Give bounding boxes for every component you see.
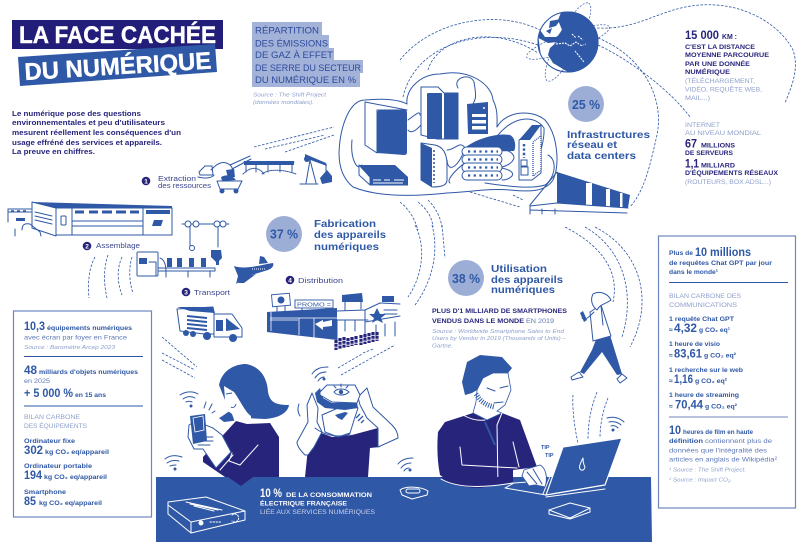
text: 15 000 km: 15 000: [685, 30, 719, 42]
panel: équipements numériques: DES ÉQUIPEMENTS: [24, 421, 88, 430]
text: smartphones vendus: PLUS D'1 MILLIARD DE SMARTPHONES: [432, 308, 568, 315]
panel: équipements numériques: 10,3: [24, 321, 45, 333]
text: 10 % consommation électrique: LIÉE AUX SERVICES NUMÉRIQUES: [260, 507, 376, 516]
panel: équipements numériques: 48: [24, 365, 38, 377]
server tower large: [365, 102, 407, 155]
step 3: transport: 3: [184, 290, 188, 296]
icon: store: [267, 293, 400, 350]
text: internet au niveau mondial: MILLIONS: [701, 142, 736, 150]
icon: laptop: TIP: [541, 445, 550, 451]
title: DU NUMÉRIQUE: [24, 47, 212, 86]
heading: répartition des émissions: DE GAZ À EFFET: [255, 50, 334, 60]
text: internet au niveau mondial: INTERNET: [685, 122, 720, 129]
network router: [359, 165, 408, 186]
text: smartphones vendus: [432, 308, 568, 350]
panel: équipements numériques: équipements numériques: [47, 325, 132, 332]
text: 10 % consommation électrique: [260, 488, 376, 516]
text: 15 000 km: KM :: [722, 34, 737, 41]
stat: 25 % infrastructures: 25 %: [572, 97, 600, 112]
text: internet au niveau mondial: 67: [685, 136, 697, 150]
text: 10 % consommation électrique: DE LA CONSOMMATION: [286, 492, 372, 499]
text: 10 % consommation électrique: ÉLECTRIQUE FRANÇAISE: [260, 498, 348, 508]
panel: requêtes et bilan carbone des communications: dans le monde¹: [669, 269, 719, 276]
icon: laptop: [505, 438, 622, 497]
text: smartphones vendus: VENDUS DANS LE MONDE: [432, 318, 525, 325]
panel: requêtes et bilan carbone des communications: 83,61: [674, 348, 703, 360]
intro text: Le numérique pose des questions: [12, 109, 141, 118]
icons: wifi signals: [165, 367, 624, 472]
panel: requêtes et bilan carbone des communications: 1 recherche sur le web: [669, 367, 743, 374]
dashed network lines: [89, 5, 795, 443]
text: internet au niveau mondial: [685, 122, 779, 186]
intro text: mesurent réellement les conséquences d'un: [12, 128, 181, 137]
text: smartphones vendus: Source : Worldwide Smartphone Sales to End: [432, 329, 565, 335]
text: 15 000 km: NUMÉRIQUE: [685, 67, 731, 76]
figure: person with VR headset: [297, 384, 398, 477]
intro text: [12, 109, 181, 156]
panel: équipements numériques: 85: [24, 496, 37, 508]
icon: factory: [8, 202, 172, 236]
network switch: [421, 143, 447, 187]
stat: 38 % utilisation: des appareils: [491, 274, 563, 286]
panel: équipements numériques: 194: [24, 470, 43, 482]
stat: 38 % utilisation: 38 %: [452, 271, 480, 286]
panel: requêtes et bilan carbone des communications: g CO₂ eq²: [705, 404, 738, 410]
panel: requêtes et bilan carbone des communications: Plus de: [669, 250, 693, 257]
icon: robot assembly line: [137, 221, 229, 277]
server towers: [421, 87, 458, 139]
panel: requêtes et bilan carbone des communications: définition: [669, 438, 703, 445]
step 1: extraction des ressources: des ressources: [158, 183, 212, 190]
text: internet au niveau mondial: MILLIARD: [701, 162, 735, 170]
panel: requêtes et bilan carbone des communications: ≈: [669, 352, 673, 360]
stat: 38 % utilisation: [448, 260, 563, 296]
icon: excavator and quarry: [198, 156, 296, 194]
step 3: transport: Transport: [194, 288, 231, 297]
panel: requêtes et bilan carbone des communications: 4,32: [674, 323, 697, 335]
text: 15 000 km: (TÉLÉCHARGEMENT,: [685, 76, 755, 85]
text: internet au niveau mondial: DE SERVEURS: [685, 150, 734, 157]
stat: 38 % utilisation: numériques: [491, 284, 555, 296]
title: LA FACE CACHÉE: [19, 21, 216, 49]
heading: répartition des émissions: DES ÉMISSIONS: [255, 38, 328, 48]
figure: walking woman: [571, 292, 627, 383]
icon: truck: [177, 307, 242, 342]
panel: requêtes et bilan carbone des communications: 10: [669, 425, 681, 437]
panel: requêtes et bilan carbone des communications: 1,16: [674, 374, 693, 386]
table: [156, 477, 652, 542]
panel: requêtes et bilan carbone des communications: g CO₂ eq²: [695, 378, 728, 385]
heading: répartition des émissions: (données mondiales).: [253, 100, 314, 106]
step 1: extraction des ressources: [142, 176, 212, 190]
panel: requêtes et bilan carbone des communications: COMMUNICATIONS: [669, 302, 738, 309]
panel: requêtes et bilan carbone des communications: articles en anglais de Wikipédia²: [669, 456, 778, 464]
panel: requêtes et bilan carbone des communications: 10 millions: [695, 247, 751, 259]
heading: répartition des émissions: DE SERRE DU SECTEUR: [255, 63, 361, 73]
panel: équipements numériques: kg CO₂ eq/appareil: [39, 500, 102, 507]
panel: requêtes et bilan carbone des communications: g CO₂ eq¹: [699, 327, 731, 334]
panel: requêtes et bilan carbone des communications: ¹ Source : The Shift Project.: [669, 468, 746, 474]
text: 15 000 km: VIDÉO, REQUÊTE WEB,: [685, 84, 762, 94]
icon: data center: [530, 172, 630, 214]
step 1: extraction des ressources: 1: [144, 178, 148, 186]
icon: laptop: TIP: [545, 453, 554, 459]
stat: 37 % fabrication: numériques: [314, 241, 379, 253]
icon: mouse: [400, 487, 428, 499]
text: internet au niveau mondial: AU NIVEAU MONDIAL: [685, 130, 761, 137]
panel: requêtes et bilan carbone des communications: g CO₂ eq²: [704, 352, 737, 360]
stat: 37 % fabrication: [266, 216, 386, 253]
step 3: transport: [182, 288, 231, 297]
panel: requêtes et bilan carbone des communications: ≈: [669, 327, 673, 334]
modem tower: [519, 125, 541, 180]
text: internet au niveau mondial: (ROUTEURS, BOX ADSL...): [685, 179, 771, 186]
intro text: usage effréné des services et appareils.: [12, 138, 162, 147]
panel: requêtes et bilan carbone des communications: 1 heure de visio: [669, 341, 720, 348]
step 2: assemblage: [83, 241, 140, 250]
panel: équipements numériques: Source : Baromètre Arcep 2023: [24, 345, 116, 351]
heading: répartition des émissions: RÉPARTITION: [255, 26, 319, 36]
step 2: assemblage: 2: [85, 244, 89, 250]
panel: équipements numériques: Ordinateur fixe: [24, 438, 75, 445]
panel: requêtes et bilan carbone des communications: [658, 236, 796, 508]
disc stack: [462, 135, 515, 180]
step 4: distribution: [286, 276, 343, 285]
panel: équipements numériques: avec écran par foyer en France: [24, 334, 127, 342]
intro text: La preuve en chiffres.: [12, 147, 95, 156]
stat: 37 % fabrication: 37 %: [270, 226, 298, 242]
panel: requêtes et bilan carbone des communications: 1 requête Chat GPT: [669, 316, 735, 323]
icon: store: PROMO =: [297, 302, 331, 308]
stat: 38 % utilisation: Utilisation: [491, 263, 547, 275]
text: 15 000 km: MAIL...): [685, 95, 710, 102]
text: 15 000 km: [685, 30, 770, 102]
stat: 37 % fabrication: des appareils: [314, 229, 386, 241]
icon: external hard drive: [549, 503, 590, 519]
panel: requêtes et bilan carbone des communications: 70,44: [675, 400, 704, 412]
heading: répartition des émissions: [252, 22, 363, 106]
text: 15 000 km: PAR UNE DONNÉE: [685, 59, 751, 68]
step 4: distribution: 4: [288, 278, 292, 284]
text: 15 000 km: MOYENNE PARCOURUE: [685, 52, 770, 59]
panel: équipements numériques: kg CO₂ eq/appareil: [44, 474, 107, 481]
panel: équipements numériques: + 5 000 %: [24, 388, 73, 400]
panel: requêtes et bilan carbone des communications: ≈: [669, 378, 673, 385]
stat: 25 % infrastructures: réseau et: [567, 139, 618, 151]
heading: répartition des émissions: DU NUMÉRIQUE EN %: [255, 75, 356, 85]
intro text: environnementales et peu d'utilisateurs: [12, 118, 165, 127]
panel: requêtes et bilan carbone des communications: ≈: [669, 404, 673, 410]
text: 15 000 km: C'EST LA DISTANCE: [685, 44, 756, 51]
panel: équipements numériques: BILAN CARBONE: [24, 414, 81, 421]
text: smartphones vendus: Users by Vendor in 2019 (Thousands of Units) –: [432, 336, 567, 342]
icon: internet box: [168, 497, 245, 533]
panel: équipements numériques: en 15 ans: [75, 392, 106, 399]
panel: requêtes et bilan carbone des communications: de requêtes Chat GPT par jour: [669, 260, 772, 267]
text: smartphones vendus: Gartne.: [432, 344, 453, 350]
step 4: distribution: Distribution: [298, 278, 343, 285]
panel: requêtes et bilan carbone des communications: BILAN CARBONE DES: [669, 293, 742, 300]
icon: globe: [524, 0, 612, 86]
figure: man with laptop: [437, 355, 537, 488]
small computer tower: [467, 102, 488, 134]
panel: requêtes et bilan carbone des communications: ² Source : Impact CO₂.: [669, 478, 732, 484]
icon: airplane: [234, 256, 273, 284]
text: 10 % consommation électrique: 10 %: [260, 488, 282, 500]
panel: requêtes et bilan carbone des communications: heures de film en haute: [683, 429, 753, 436]
panel: équipements numériques: 302: [24, 445, 43, 457]
figure: woman with smartphone: [188, 364, 289, 488]
heading: répartition des émissions: Source : The Shift Project: [253, 92, 326, 98]
panel: équipements numériques: Ordinateur portable: [24, 463, 92, 470]
panel: requêtes et bilan carbone des communications: 1 heure de streaming: [669, 392, 739, 399]
title: [12, 20, 223, 86]
cloud of infrastructures: [339, 73, 557, 195]
panel: équipements numériques: en 2025: [24, 378, 50, 385]
panel: équipements numériques: kg CO₂ eq/appareil: [45, 449, 109, 456]
text: smartphones vendus: EN 2019: [526, 318, 554, 325]
panel: requêtes et bilan carbone des communications: données que l'intégralité des: [669, 448, 768, 454]
panel: requêtes et bilan carbone des communications: contiennent plus de: [705, 438, 772, 445]
text: internet au niveau mondial: D'ÉQUIPEMENTS RÉSEAUX: [685, 168, 779, 177]
stat: 25 % infrastructures: Infrastructures: [567, 129, 650, 141]
text: internet au niveau mondial: 1,1: [685, 156, 699, 170]
stat: 25 % infrastructures: data centers: [567, 150, 636, 162]
stat: 37 % fabrication: Fabrication: [314, 218, 376, 230]
stat: 25 % infrastructures: [567, 86, 650, 162]
icon: oil pump: [300, 154, 332, 184]
panel: équipements numériques: Smartphone: [24, 489, 66, 496]
panel: équipements numériques: milliards d'objets numériques: [39, 369, 138, 376]
step 1: extraction des ressources: Extraction: [158, 176, 196, 183]
panel: équipements numériques: [14, 311, 152, 517]
step 2: assemblage: Assemblage: [96, 241, 140, 250]
